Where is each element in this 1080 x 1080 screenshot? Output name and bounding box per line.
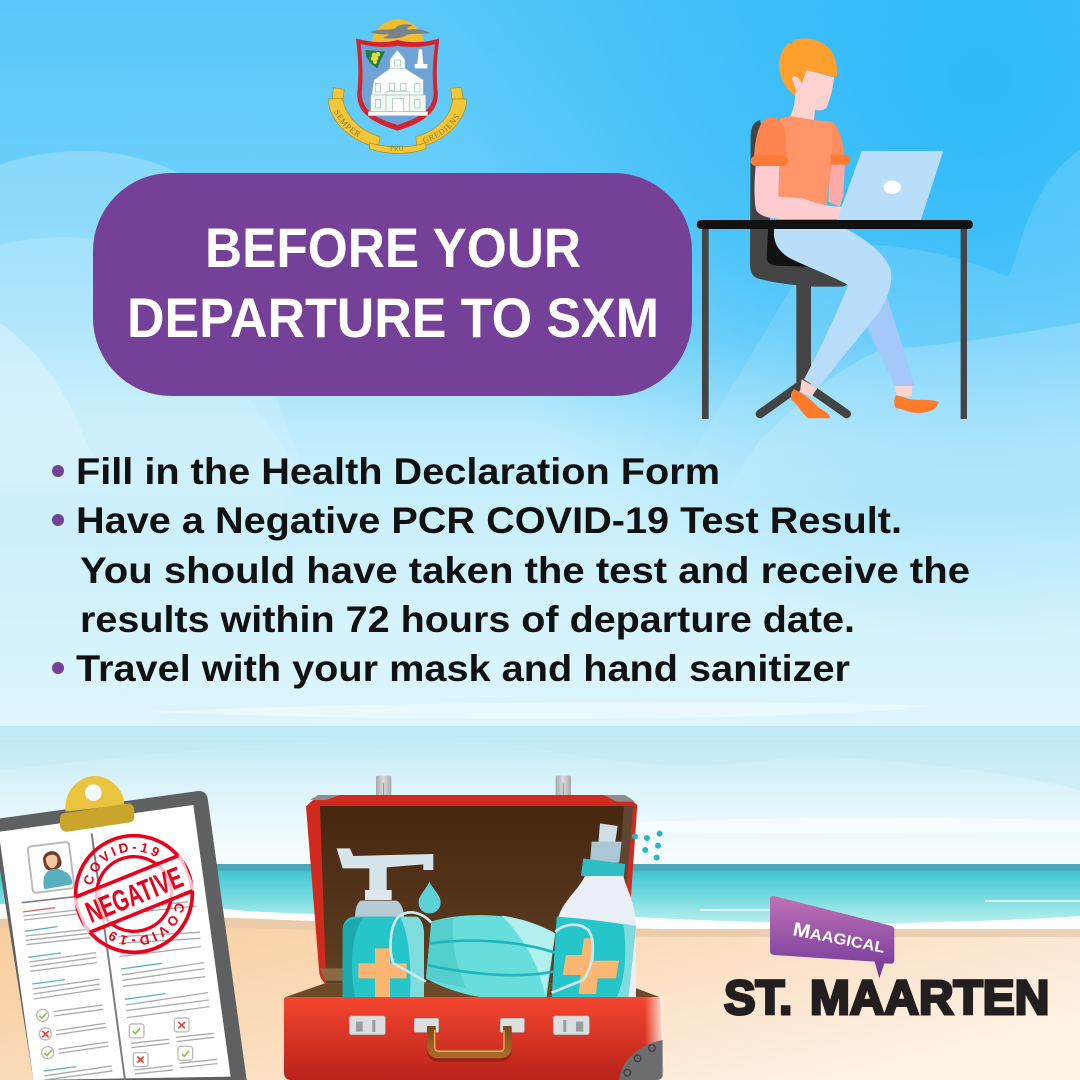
hinges: [376, 776, 571, 801]
bullet 3: [52, 662, 64, 674]
illustration: clipboard with negative test: [0, 776, 247, 1080]
item 2 line 3: results within 72 hours of departure date.: [80, 599, 855, 640]
paper: [0, 805, 231, 1080]
t-shirt: [778, 116, 844, 206]
court house: [368, 50, 428, 116]
item 2 line 2: You should have taken the test and receive the: [80, 550, 970, 591]
corner plate: [619, 1040, 663, 1080]
suitcase base: [284, 997, 663, 1080]
check and cross marks: [37, 1009, 193, 1067]
item 1: Fill in the Health Declaration Form: [76, 451, 720, 492]
board: [0, 791, 247, 1080]
near shoe: [791, 389, 830, 418]
illustration: person at laptop: [697, 38, 973, 419]
spray dots: [632, 831, 663, 861]
bubble text: MAAGICAL: [791, 919, 887, 958]
title line 1: BEFORE YOUR: [205, 216, 581, 279]
title panel: [93, 173, 692, 396]
item 2 line 1: Have a Negative PCR COVID-19 Test Result.: [76, 500, 902, 541]
chair: [750, 120, 847, 287]
pelican: [370, 24, 430, 39]
mask: [391, 912, 593, 997]
sun: [372, 19, 424, 42]
stamp: [74, 834, 194, 954]
speech bubble: [770, 896, 894, 978]
sleeve: [754, 117, 787, 157]
clip: [65, 776, 124, 812]
near arm: [754, 163, 843, 219]
form lines: [22, 897, 217, 1080]
laptop: [837, 151, 943, 221]
desk: [702, 227, 709, 419]
pump bottle: [337, 848, 433, 997]
grapes: [365, 50, 385, 68]
face and neck: [790, 70, 834, 120]
stamp bottom text: COVID-19: [109, 904, 184, 945]
stamp word: negative: NEGATIVE: [81, 861, 188, 930]
latches: [349, 1016, 589, 1035]
drop: [419, 882, 441, 913]
far arm: [828, 163, 845, 207]
handle: [431, 1028, 507, 1057]
wordmark: st.: ST.: [724, 971, 792, 1025]
hair: [779, 38, 837, 96]
lid: [306, 795, 637, 983]
spine: [92, 833, 125, 1080]
illustration: suitcase with sanitizer and mask: [284, 776, 663, 1080]
shield: [356, 38, 439, 131]
photo: [27, 842, 74, 893]
checklist text: [52, 451, 970, 689]
far shoe: [894, 395, 939, 413]
far leg: [867, 297, 915, 387]
motto: semper: SEMPER: [334, 110, 360, 138]
spray bottle: [552, 823, 636, 997]
ear loops: [391, 912, 431, 982]
base inner: [285, 983, 660, 997]
near leg: [774, 229, 891, 388]
wordmark: maarten: MAARTEN: [810, 971, 1049, 1025]
title line 2: DEPARTURE TO SXM: [127, 286, 659, 349]
crest of St. Maarten: [328, 19, 467, 154]
item 3: Travel with your mask and hand sanitizer: [76, 648, 850, 689]
stamp top text: COVID-19: [84, 843, 159, 884]
bullet 1: [52, 465, 64, 477]
motto: pro: PRO: [390, 144, 404, 152]
ribbon: [328, 87, 467, 153]
motto: grediens: GREDIENS: [423, 114, 459, 142]
monument: [415, 49, 427, 68]
logo: Maagical St. Maarten: [724, 896, 1049, 1025]
bullet 2: [52, 514, 64, 526]
